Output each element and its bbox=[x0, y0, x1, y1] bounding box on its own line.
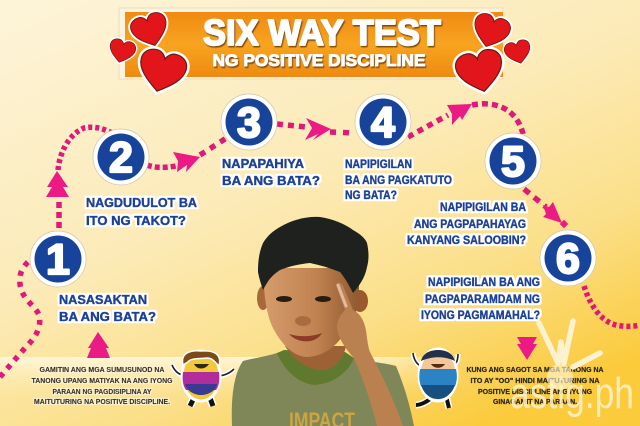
left instruction text bbox=[32, 367, 173, 406]
question 1 bbox=[59, 292, 156, 324]
cartoon: girl bbox=[172, 351, 234, 406]
right instruction text bbox=[466, 367, 604, 406]
question 6: NAPIPIGILAN BA ANG bbox=[428, 277, 540, 289]
right instruction text: ITO AY "OO" HINDI MAITUTURING NA bbox=[470, 378, 600, 385]
question 2: ITO NG TAKOT? bbox=[86, 213, 186, 228]
hand and arm bbox=[336, 283, 403, 426]
question 5: KANYANG SALOOBIN? bbox=[407, 235, 526, 247]
hearts left bbox=[107, 10, 189, 97]
question 1: BA ANG BATA? bbox=[59, 309, 156, 324]
arrow: 5 to 6 bbox=[543, 202, 562, 223]
hearts right bbox=[453, 11, 533, 96]
question 6 bbox=[421, 277, 540, 322]
ears bbox=[257, 286, 269, 310]
number badge 3: 3 bbox=[237, 99, 261, 147]
arrow: 1 to 2 bbox=[46, 171, 69, 197]
number badge 4: 4 bbox=[371, 99, 395, 147]
shirt bbox=[232, 353, 414, 426]
hair bbox=[258, 217, 368, 293]
arrow: down bbox=[517, 337, 537, 360]
face bbox=[264, 268, 359, 357]
right instruction text: KUNG ANG SAGOT SA MGA TANONG NA bbox=[466, 367, 604, 374]
question 3: NAPAPAHIYA bbox=[222, 156, 305, 171]
question 3: BA ANG BATA? bbox=[222, 173, 320, 188]
question 6: PAGPAPARAMDAM NG bbox=[425, 294, 540, 306]
question 5 bbox=[407, 202, 526, 247]
question 5: NAPIPIGILAN BA bbox=[440, 202, 526, 214]
question 4 bbox=[345, 159, 452, 202]
number badge 4 bbox=[355, 94, 411, 150]
number badge 5 bbox=[485, 133, 541, 189]
question 1: NASASAKTAN bbox=[59, 292, 147, 307]
right instruction text: POSITIVE DISCIPLINE ANG IYONG bbox=[478, 389, 593, 396]
dash: end of 5 to 6 bbox=[560, 220, 568, 228]
watermark bbox=[510, 321, 634, 418]
title banner bbox=[119, 8, 503, 79]
question 5: ANG PAGPAPAHAYAG bbox=[414, 219, 526, 231]
arrow: 2 to 3 bbox=[173, 152, 200, 172]
question 4: NG BATA? bbox=[345, 190, 397, 202]
left instruction text: GAMITIN ANG MGA SUMUSUNOD NA bbox=[40, 367, 164, 374]
number badge 6 bbox=[540, 230, 596, 286]
boy photo bbox=[232, 217, 414, 426]
number badge 3 bbox=[221, 94, 277, 150]
subtitle text: NG POSITIVE DISCIPLINE bbox=[212, 51, 426, 70]
number badge 2: 2 bbox=[109, 134, 133, 182]
number badge 2 bbox=[93, 129, 149, 185]
number badge 1 bbox=[30, 231, 86, 287]
right instruction text: GINAGAMIT NA PARAAN. bbox=[493, 399, 577, 406]
dashed path bbox=[0, 104, 640, 377]
question 3 bbox=[222, 156, 320, 188]
left instruction text: PARAAN NG PAGDISIPLINA AY bbox=[52, 389, 152, 396]
nose bbox=[295, 316, 311, 326]
question 4: NAPIPIGILAN bbox=[345, 159, 412, 171]
number badge 1: 1 bbox=[46, 236, 70, 284]
title text: SIX WAY TEST bbox=[203, 12, 441, 53]
left instruction text: MAITUTURING NA POSITIVE DISCIPLINE. bbox=[34, 399, 170, 406]
arrow: 4 to 5 bbox=[447, 104, 472, 125]
arrow: up bbox=[87, 332, 110, 358]
cartoon: boy bbox=[413, 349, 458, 408]
eyes bbox=[276, 296, 331, 302]
question 6: IYONG PAGMAMAHAL? bbox=[421, 310, 540, 322]
left instruction text: TANONG UPANG MATIYAK NA ANG IYONG bbox=[32, 378, 173, 385]
mouth bbox=[289, 333, 322, 341]
number badge 5: 5 bbox=[501, 138, 525, 186]
question 2 bbox=[86, 195, 198, 228]
arrows bbox=[46, 104, 568, 360]
question 4: BA ANG PAGKATUTO bbox=[345, 175, 452, 187]
arrow: 3 to 4 bbox=[305, 118, 331, 140]
number badge 6: 6 bbox=[556, 235, 580, 283]
question 2: NAGDUDULOT BA bbox=[86, 195, 198, 210]
